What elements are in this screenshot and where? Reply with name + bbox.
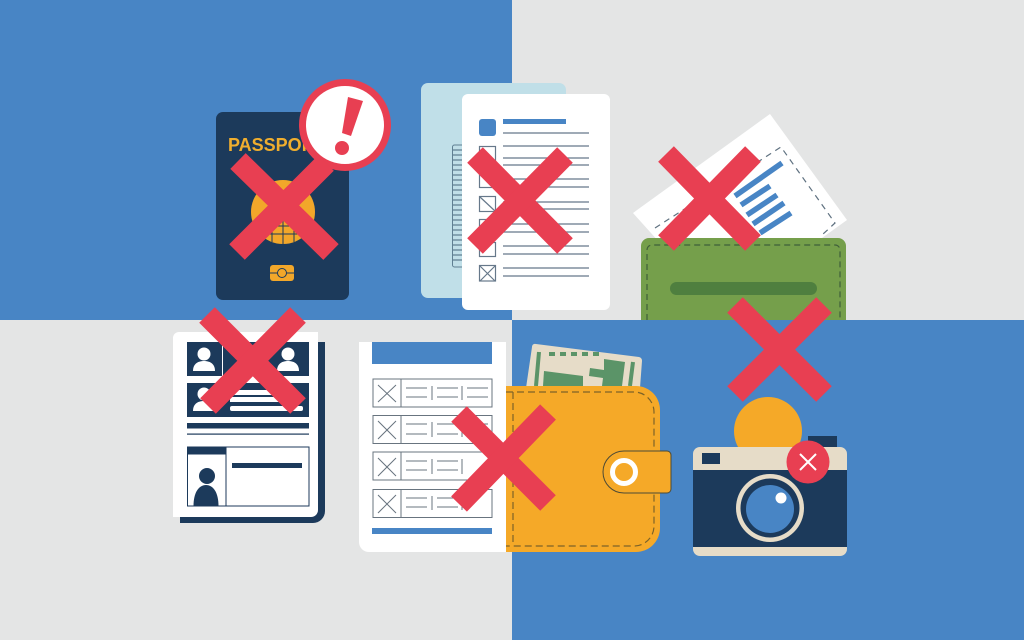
red cross: camera [735,305,824,394]
photo row [187,342,309,376]
passport chip [270,265,294,281]
green wallet [641,238,846,320]
wallet stitching [506,392,654,546]
orange sun disc [734,397,802,465]
viewfinder hump [808,436,837,448]
portrait card [187,447,309,506]
icon: ID document [173,332,325,523]
red cross: ticket [666,154,753,243]
form row 1 [373,379,492,407]
passport emblem [251,180,315,244]
icon: camera [693,397,847,556]
camera lens [736,474,804,542]
form row 3 [373,452,492,480]
back sheet [421,83,566,298]
ticket [633,114,847,243]
form row 4 [373,489,492,518]
front sheet [462,94,610,310]
form header [479,119,566,136]
alert badge [302,82,388,168]
form banner [372,342,492,364]
text rules [187,423,309,435]
spiral binding [452,145,464,267]
icon: passport [216,112,349,300]
checkboxes [480,146,496,281]
red cross: ID document [207,315,298,406]
banknote [526,344,642,388]
red cross: passport [237,161,331,252]
booklet shadow [180,342,325,523]
booklet page [173,332,318,517]
icon: orange wallet with cash [506,344,671,552]
form footer bar [372,528,492,534]
icon: ticket in green wallet [633,114,847,320]
wallet clasp [603,451,671,493]
form lines [503,133,589,276]
red cross: form and wallet [459,412,548,504]
form row 2 [373,415,492,444]
icon: table form [359,342,506,552]
camera body [693,447,847,556]
passport label: PASSPORT [228,135,326,155]
icon: checklist documents [421,83,610,310]
red error badge [786,440,830,484]
detail row [187,383,309,417]
wallet body [506,386,660,552]
red cross: checklist [475,155,565,246]
